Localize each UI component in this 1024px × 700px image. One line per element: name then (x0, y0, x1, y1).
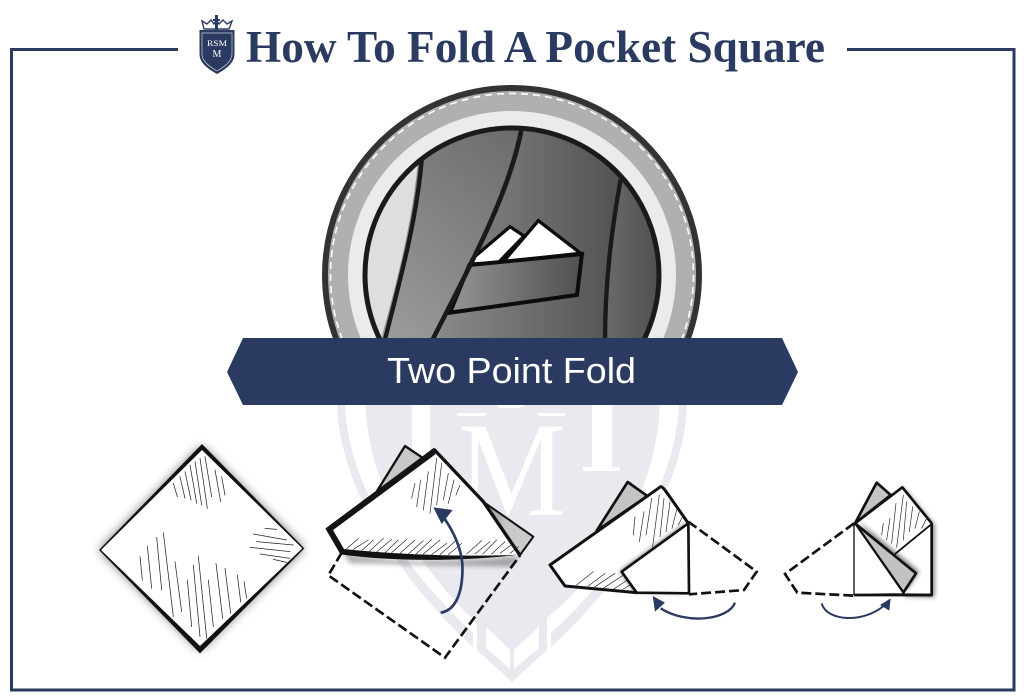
step 2: fold bottom corner up (326, 446, 533, 658)
grey flap (858, 521, 919, 591)
badge: jacket pocket circle (322, 85, 702, 338)
logo crest: RSM (207, 39, 227, 48)
watermark: shield emblem (337, 396, 687, 682)
step 1: flat square (99, 444, 304, 653)
watermark: shield emblem: M (458, 396, 566, 545)
pocket square peaks (470, 221, 581, 264)
logo crest: M (213, 49, 222, 60)
jacket pocket (450, 254, 582, 313)
hatching (347, 458, 518, 555)
arrow up (433, 507, 462, 613)
title: How To Fold A Pocket Square (246, 22, 825, 72)
folded panel (328, 451, 520, 558)
dashed outline (328, 553, 520, 658)
hatching (882, 495, 927, 547)
banner: Two Point Fold (387, 350, 636, 391)
front flap (620, 523, 687, 593)
banner (227, 338, 798, 405)
arrow left (653, 596, 735, 619)
hatching (140, 457, 293, 638)
logo crest (200, 15, 234, 74)
hatching (577, 495, 683, 590)
step 4: fold right side in (785, 483, 935, 618)
step 3: fold left side in (550, 482, 757, 619)
arrow right (822, 598, 891, 618)
